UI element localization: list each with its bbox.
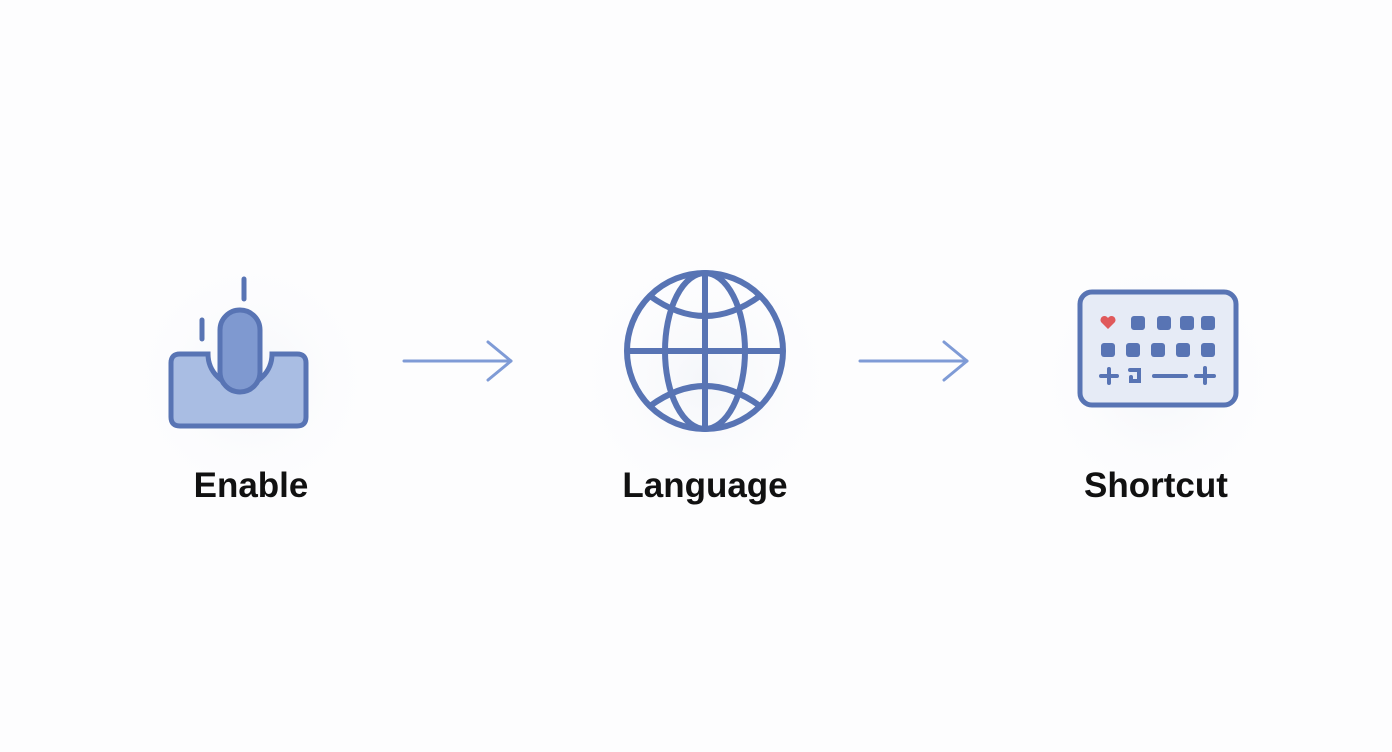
label: Shortcut: Shortcut — [1084, 466, 1228, 505]
label: Language: Language — [622, 466, 788, 505]
arrow 2 — [860, 342, 967, 380]
icon: keyboard — [1080, 292, 1236, 405]
icon: enable toggle — [171, 279, 306, 426]
label: Enable: Enable — [194, 466, 308, 505]
arrow 1 — [404, 342, 511, 380]
icon: globe — [627, 273, 783, 429]
